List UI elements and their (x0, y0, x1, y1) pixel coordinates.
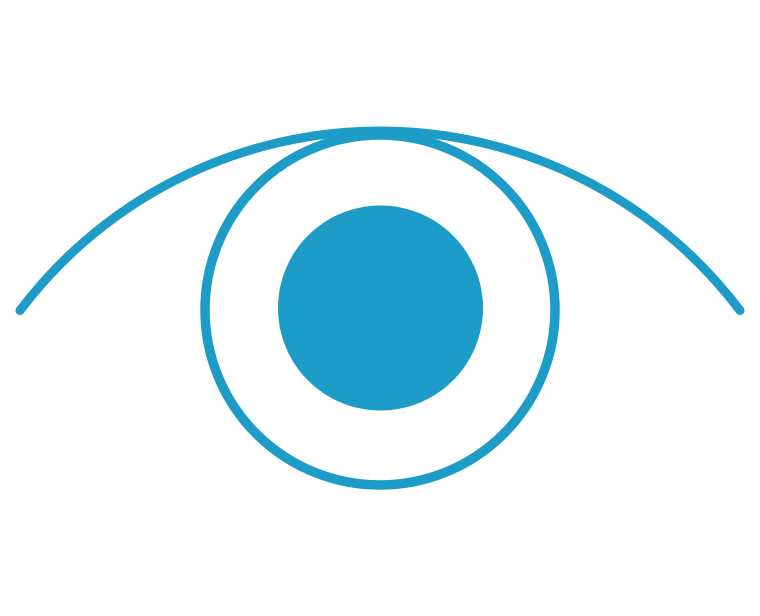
iris ring (205, 135, 555, 485)
pupil (278, 206, 483, 410)
eyelid arc (20, 131, 740, 310)
